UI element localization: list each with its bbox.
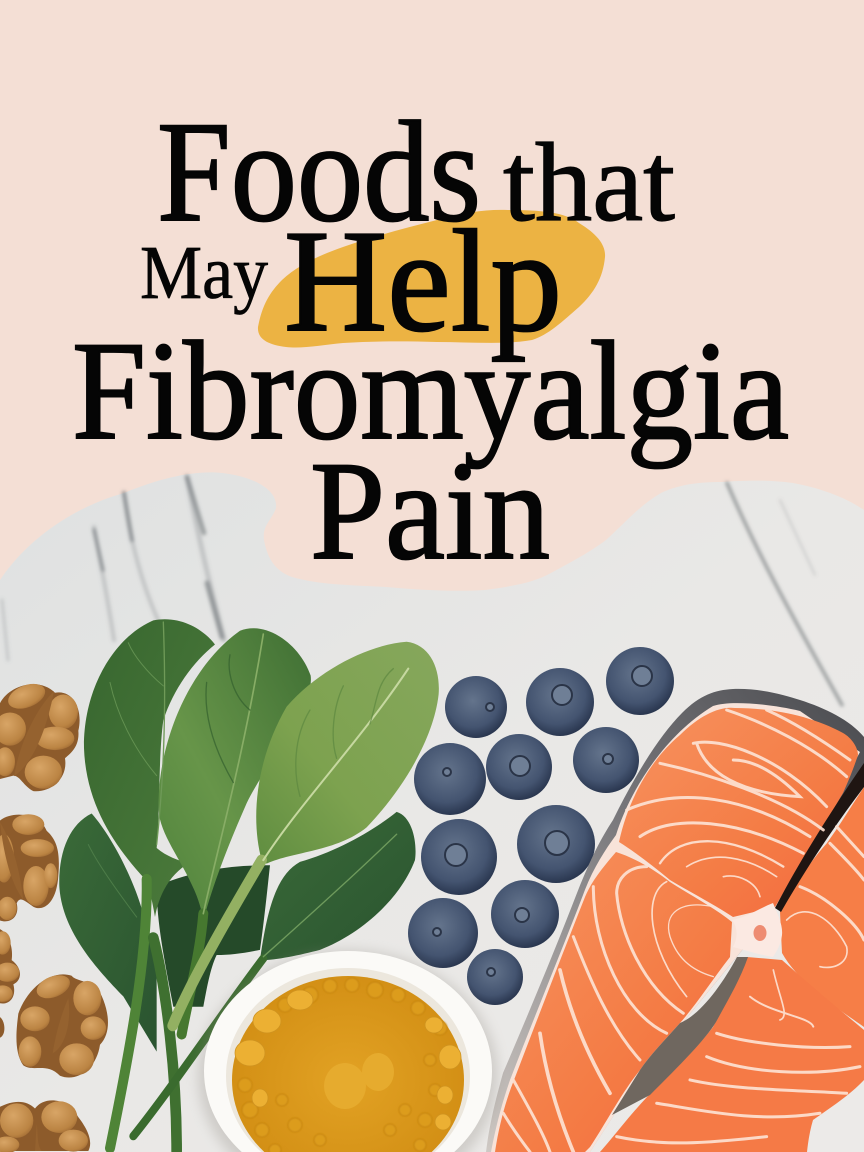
turmeric mound bbox=[324, 1053, 394, 1109]
lower right leaf bbox=[260, 812, 416, 960]
spinach leaves bbox=[59, 619, 439, 1151]
right salmon lobe bbox=[780, 787, 864, 1027]
stems bbox=[110, 860, 263, 1151]
turmeric powder bbox=[232, 976, 464, 1152]
middle leaf bbox=[159, 628, 311, 920]
title line 1: Foods bbox=[157, 93, 481, 252]
salmon steak bbox=[486, 689, 864, 1152]
title: Help bbox=[284, 200, 562, 362]
top salmon lobe bbox=[619, 708, 858, 917]
walnuts bbox=[0, 679, 108, 1152]
title: that bbox=[503, 121, 675, 245]
left salmon lobe bbox=[495, 852, 732, 1152]
front light leaf bbox=[256, 642, 439, 864]
blueberries bbox=[408, 647, 674, 1005]
marble veins bbox=[2, 477, 842, 705]
bottom salmon lobe bbox=[600, 957, 864, 1152]
title line 4: Pain bbox=[310, 433, 550, 589]
marble surface bbox=[0, 472, 864, 1152]
lower dark leaf left bbox=[59, 814, 157, 1052]
bowl bbox=[204, 951, 492, 1152]
walnut lobes bbox=[0, 679, 106, 1152]
walnut shell wedges bbox=[0, 691, 69, 1151]
title line 3: Fibromyalgia bbox=[72, 313, 789, 469]
turmeric bowl bbox=[198, 950, 498, 1152]
top left leaf bbox=[84, 619, 215, 917]
walnut bases bbox=[0, 684, 108, 1151]
highlight blob bbox=[258, 210, 605, 348]
salmon gap bbox=[612, 957, 748, 1115]
salmon skin bbox=[486, 689, 864, 1152]
dark leaf behind bbox=[157, 865, 270, 1007]
salmon rim bbox=[491, 703, 860, 1152]
salmon center bbox=[732, 903, 782, 957]
title bbox=[72, 93, 789, 589]
salmon fat lines bbox=[503, 710, 864, 1152]
leaf veins bbox=[88, 622, 408, 957]
salmon crack bbox=[775, 763, 864, 912]
title line 2: May bbox=[140, 231, 268, 315]
